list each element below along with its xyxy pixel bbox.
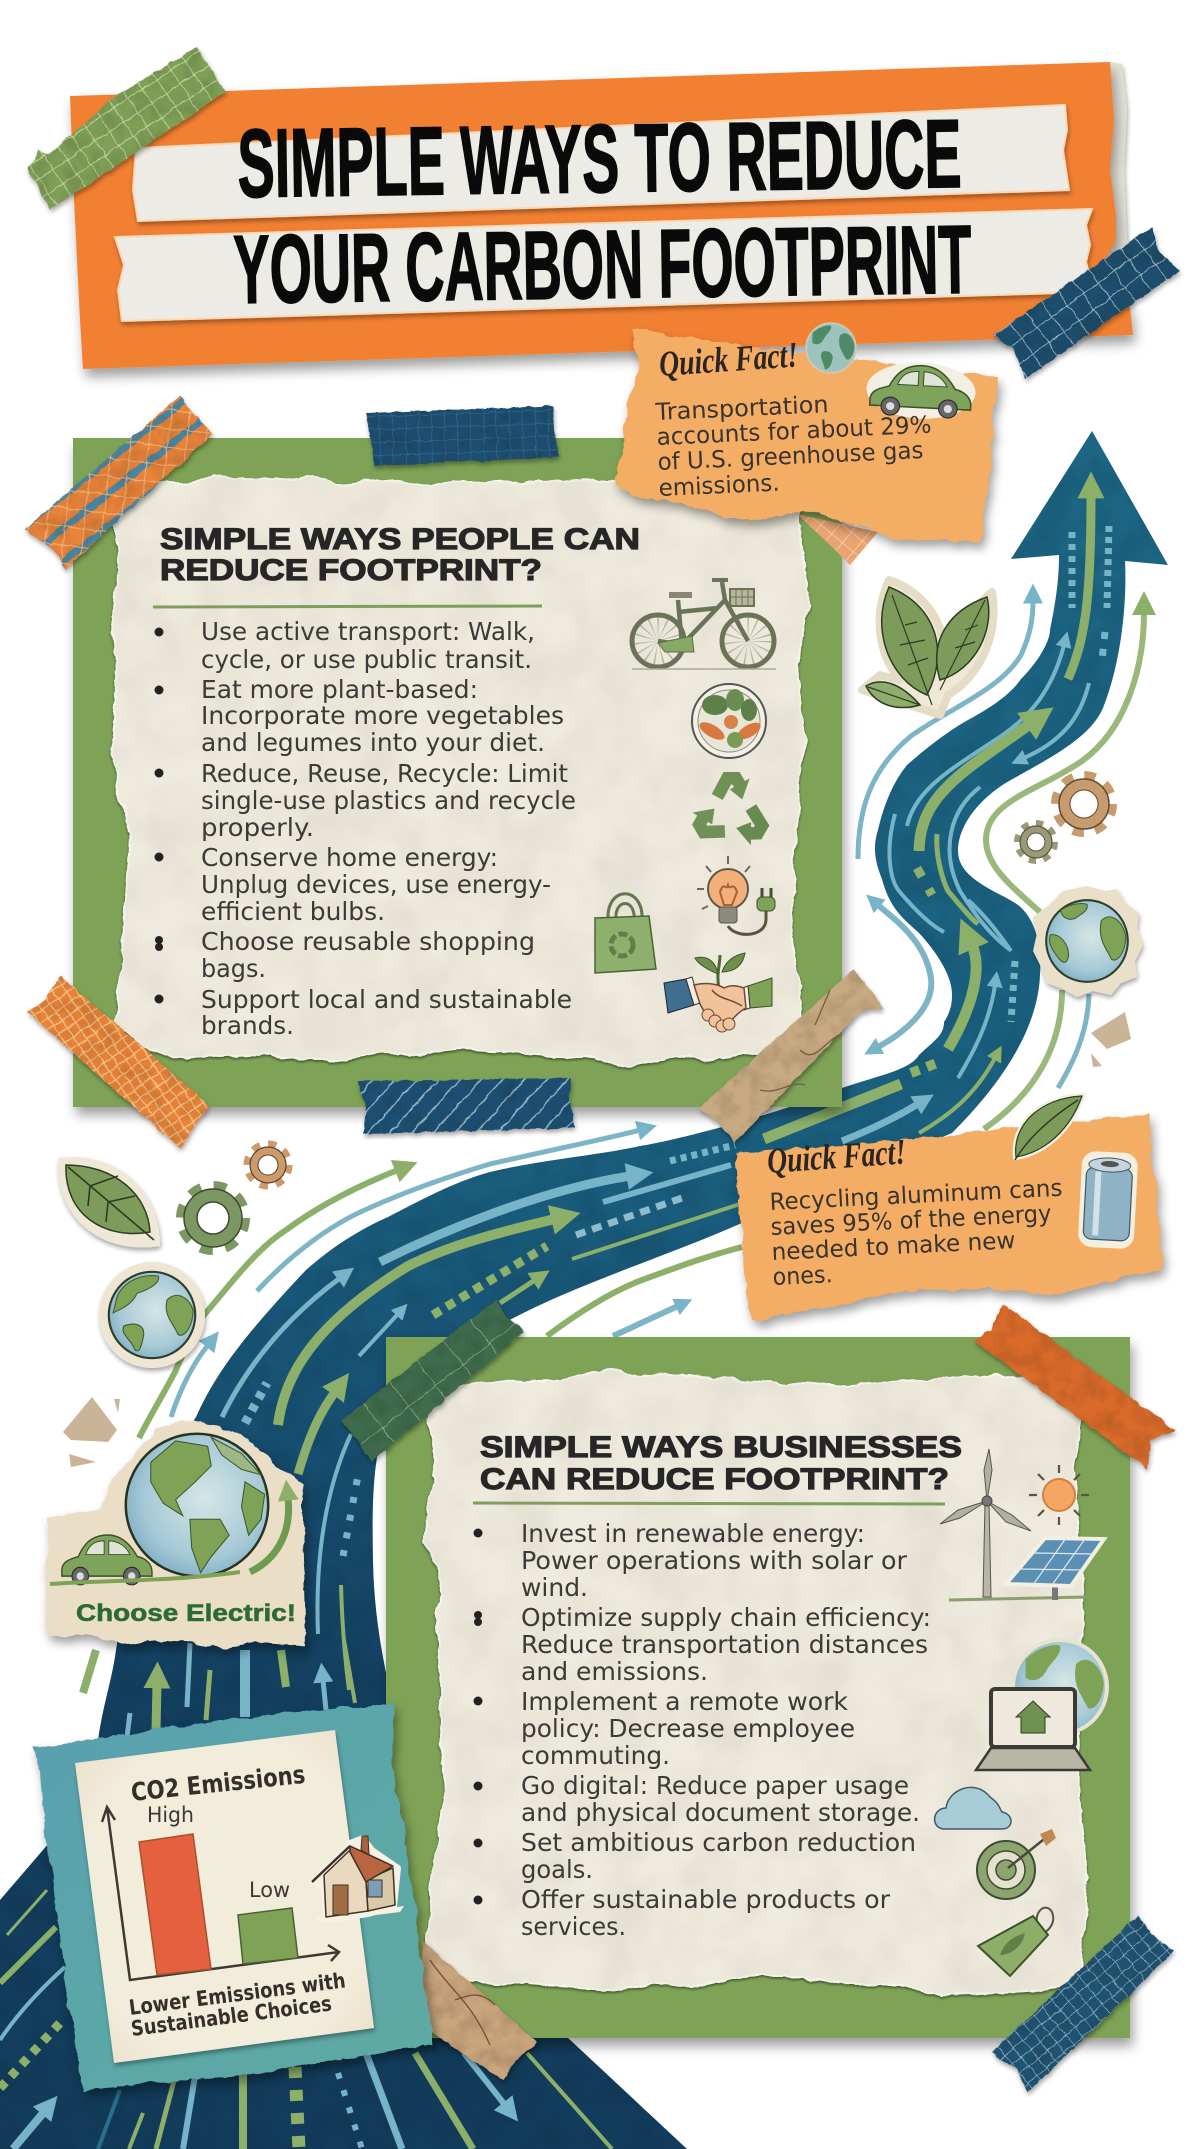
icon: leaf left (58, 1157, 160, 1247)
tape: kraft bottom (422, 1940, 538, 2081)
icon: leaf (1015, 1096, 1082, 1160)
heading: Quick Fact! (658, 334, 799, 384)
green card (386, 1337, 1130, 2038)
bullet list: Set ambitious carbon reduction (521, 1828, 916, 1857)
orange note (735, 1114, 1163, 1322)
icon: laptop (976, 1689, 1090, 1770)
tape: navy grid bottom right (991, 1915, 1175, 2093)
bullet list: bags. (201, 954, 266, 983)
heading (160, 523, 640, 587)
bullet list: efficient bulbs. (201, 897, 385, 926)
bullet list (474, 1519, 931, 1941)
fact text (654, 390, 932, 502)
label high: High (147, 1803, 194, 1827)
tape: navy grid top right (993, 227, 1179, 379)
torn paper (111, 476, 807, 1067)
stone fragments right (1091, 1012, 1131, 1067)
heading: SIMPLE WAYS PEOPLE CAN (160, 523, 640, 556)
bullet list: Use active transport: Walk, (201, 617, 535, 646)
tape: orange grid (27, 975, 210, 1148)
bullet list: Eat more plant-based: (201, 675, 478, 704)
icon: globe pin (806, 323, 856, 373)
tape: peach under quick fact (797, 514, 878, 565)
caption (128, 1968, 347, 2041)
heading: Quick Fact! (766, 1131, 907, 1181)
icon: small gear right (1018, 824, 1054, 860)
title banner (70, 62, 1133, 369)
car (62, 1535, 152, 1585)
icon: globe left (99, 1262, 205, 1368)
icon: leaves (862, 580, 994, 715)
bullet list: Optimize supply chain efficiency: (521, 1603, 931, 1632)
label low: Low (249, 1878, 290, 1902)
bar: low (238, 1908, 298, 1964)
icon: house (312, 1836, 404, 1922)
fact text: needed to make new (771, 1226, 1016, 1266)
icon: plate (692, 684, 766, 758)
bullet list: Unplug devices, use energy- (201, 870, 551, 899)
fact text: Transportation (654, 390, 829, 426)
bullet list: and physical document storage. (521, 1798, 920, 1827)
fact text: ones. (772, 1260, 833, 1291)
bullet list: and emissions. (521, 1657, 708, 1686)
heading: REDUCE FOOTPRINT? (160, 554, 542, 587)
bullet list: brands. (201, 1011, 294, 1040)
bullet list: goals. (521, 1855, 593, 1884)
globe (126, 1434, 268, 1576)
chart card: CO2 emissions (33, 1703, 433, 2090)
label: Choose Electric! (76, 1600, 296, 1627)
fact text: of U.S. greenhouse gas (657, 436, 924, 476)
axes (102, 1807, 339, 1980)
bullet list: Go digital: Reduce paper usage (521, 1771, 909, 1800)
bullet list: Incorporate more vegetables (201, 701, 564, 730)
icon: handshake with sprout (664, 953, 772, 1032)
heading: SIMPLE WAYS BUSINESSES (480, 1431, 962, 1464)
bullet list: wind. (521, 1573, 588, 1602)
bar: high (139, 1834, 211, 1975)
quick fact: aluminum cans (735, 1096, 1163, 1322)
bullet list: policy: Decrease employee (521, 1714, 855, 1743)
quick fact: transportation (615, 323, 998, 544)
icon: bicycle (632, 580, 776, 669)
torn paper backing (1100, 62, 1128, 270)
fact text: Recycling aluminum cans (769, 1174, 1063, 1216)
paper strip 1 (133, 105, 1069, 221)
green arrow around globe (250, 1498, 289, 1572)
icon: large gear right (1056, 776, 1112, 832)
bullet list (154, 617, 576, 1040)
tape: navy stripes (358, 1078, 575, 1134)
torn paper (47, 1419, 306, 1648)
torn paper (424, 1371, 1087, 1996)
fact text: emissions. (658, 469, 780, 502)
caption: Lower Emissions with (128, 1968, 347, 2020)
bullet list: properly. (201, 813, 314, 842)
tape: navy top of panel (366, 406, 559, 466)
middle road lanes (948, 945, 976, 1049)
callout: choose electric (47, 1419, 306, 1648)
bullet list: Conserve home energy: (201, 843, 498, 872)
panel: people (73, 438, 842, 1107)
bullet list: cycle, or use public transit. (201, 645, 532, 674)
icon: target (977, 1829, 1056, 1899)
icon: sun (1029, 1465, 1089, 1525)
caption: Sustainable Choices (130, 1991, 333, 2041)
bullet list: Reduce, Reuse, Recycle: Limit (201, 759, 568, 788)
cream sheet (75, 1730, 374, 2063)
fact text: saves 95% of the energy (770, 1199, 1052, 1241)
bullet list: commuting. (521, 1741, 670, 1770)
lower road lanes (156, 1685, 157, 1730)
paper strip 2 (115, 209, 1094, 321)
bullet list: Invest in renewable energy: (521, 1519, 865, 1548)
orange panel (70, 62, 1133, 369)
bullet list: Reduce transportation distances (521, 1630, 928, 1659)
icon: shopping bag (595, 894, 656, 973)
icon: green gear (181, 1186, 245, 1250)
icon: light bulb (697, 856, 775, 934)
bullet list: Power operations with solar or (521, 1546, 908, 1575)
tape: green grid top left (27, 47, 226, 210)
bullet list: Offer sustainable products or (521, 1885, 891, 1914)
tape: kraft (699, 969, 884, 1143)
icon: can (1078, 1151, 1138, 1249)
bullet list: Choose reusable shopping (201, 927, 535, 956)
bullet list: single-use plastics and recycle (201, 786, 576, 815)
tape: rust orange (974, 1304, 1176, 1469)
bullet list: Support local and sustainable (201, 985, 572, 1014)
stone fragments left (63, 1397, 120, 1467)
fact text: accounts for about 29% (656, 411, 932, 451)
teal paper (33, 1703, 433, 2090)
road: winding arrow (0, 431, 1168, 2149)
orange note (615, 330, 998, 544)
green card (73, 438, 842, 1107)
bullet list: services. (521, 1912, 626, 1941)
icon: orange gear (248, 1145, 288, 1185)
icon: cloud (935, 1787, 1011, 1829)
heading (480, 1431, 962, 1496)
chart title: CO2 Emissions (130, 1760, 307, 1807)
icon: tag (978, 1908, 1053, 1976)
icon: car (865, 360, 977, 421)
icon: globe right (1033, 886, 1143, 997)
tape: orange blue stripes (24, 396, 213, 569)
icon: solar panel (1006, 1538, 1104, 1600)
tape: dark green (341, 1299, 524, 1462)
icon: wind turbine (940, 1449, 1087, 1600)
icon: recycle (692, 778, 767, 845)
heading: CAN REDUCE FOOTPRINT? (480, 1463, 949, 1496)
bullet list: and legumes into your diet. (201, 728, 545, 757)
icon: globe (1013, 1640, 1107, 1734)
outer route arrows (83, 601, 1144, 1693)
bullet list: Implement a remote work (521, 1687, 849, 1716)
fact text (769, 1174, 1063, 1291)
upper road lanes (0, 495, 1109, 2149)
panel: businesses (386, 1337, 1130, 2038)
